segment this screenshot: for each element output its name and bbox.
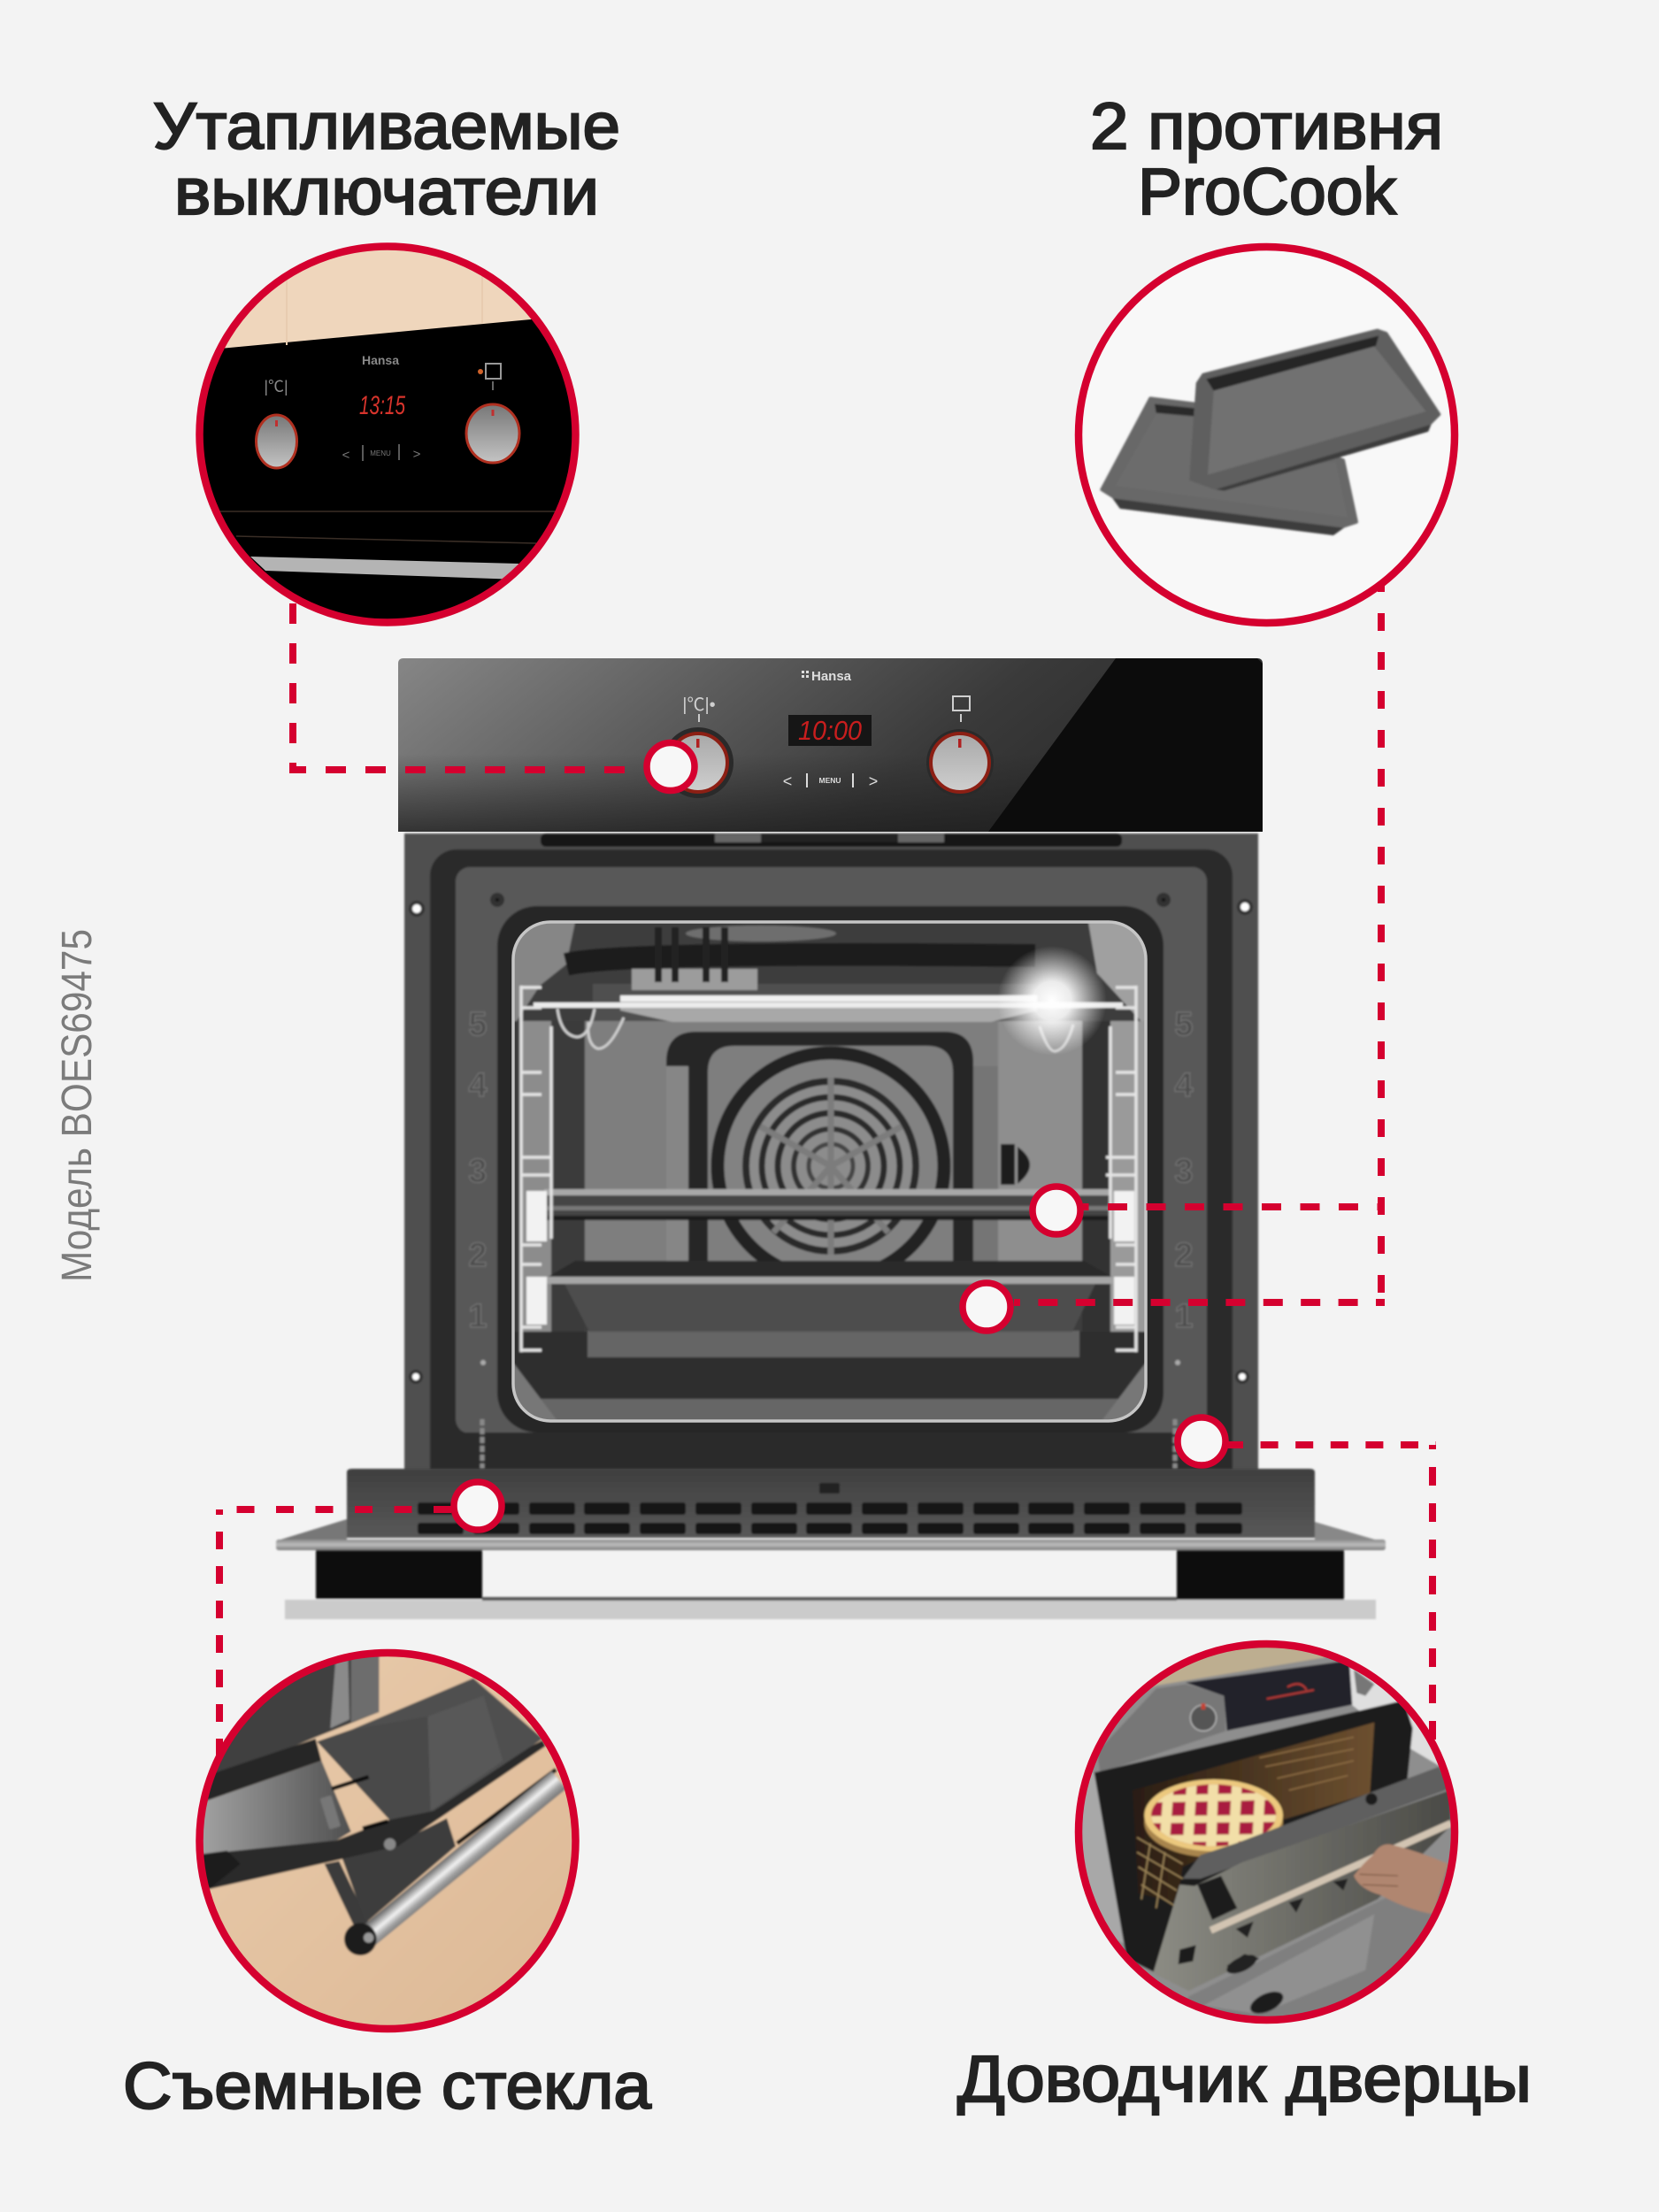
lower tray (547, 1261, 1113, 1278)
rack level numbers: 5 (1174, 1006, 1194, 1043)
oven (276, 658, 1386, 1619)
connector block and heating rods (632, 969, 757, 990)
touch menu: MENU (818, 776, 841, 785)
inset left knob: |℃| (264, 378, 288, 396)
touch menu (783, 772, 878, 790)
upper tray (547, 1194, 1108, 1217)
lower tray (1102, 398, 1356, 534)
glass edge (276, 1540, 1386, 1550)
door top (1183, 1767, 1449, 1878)
fan grille (742, 1078, 919, 1255)
touch menu: < (783, 772, 792, 790)
sensor (1001, 1144, 1030, 1185)
rack level numbers: 2 (468, 1237, 488, 1274)
inset touch menu: MENU (370, 449, 391, 457)
heading: door closer: Доводчик дверцы (957, 2042, 1532, 2116)
heading: two ProCook trays (1090, 89, 1443, 228)
vent slots (418, 1502, 1242, 1534)
rack level numbers: 4 (468, 1067, 488, 1104)
fan housing (666, 1032, 973, 1262)
marker dots (454, 743, 1225, 1530)
pie (1144, 1788, 1283, 1857)
heading: recessed switches: Утапливаемые (153, 89, 620, 163)
heading: recessed switches (153, 89, 620, 228)
circle: two baking trays (1079, 247, 1455, 623)
top rack (619, 1001, 1035, 1023)
model label: Модель BOES69475 (54, 929, 101, 1282)
callout connector lines (216, 574, 1436, 1761)
heading: removable glass: Съемные стекла (123, 2049, 652, 2123)
rail clips (526, 1191, 547, 1241)
inset touch menu: > (413, 447, 421, 462)
rack level numbers: 1 (468, 1298, 488, 1335)
rack level numbers: 5 (468, 1006, 488, 1043)
lower floor (585, 1262, 1082, 1288)
cabinet (1171, 1855, 1466, 2044)
oven door (276, 1469, 1386, 1619)
circle: door closer photo (1053, 1619, 1478, 2044)
rack level numbers: 4 (1174, 1067, 1194, 1104)
rack level numbers: 3 (468, 1153, 488, 1190)
heading: recessed switches: выключатели (174, 155, 599, 228)
door lower strip (285, 1600, 1376, 1619)
inset display: 13:15 (359, 391, 405, 420)
rails (521, 986, 1136, 1352)
circle: removable glass (177, 1628, 619, 2070)
back wall (584, 1019, 999, 1262)
left knob: |℃|• (682, 695, 716, 715)
heading: two ProCook trays: ProCook (1138, 155, 1397, 228)
rack level numbers: 3 (1174, 1153, 1194, 1190)
lamp glow (997, 946, 1107, 1056)
inset handle (250, 557, 518, 580)
upper tray (1191, 330, 1440, 489)
left knob (663, 695, 733, 798)
touch menu: > (869, 772, 878, 790)
rack level numbers: 2 (1174, 1237, 1194, 1274)
inset logo: Hansa (362, 353, 399, 367)
door feet (316, 1548, 482, 1599)
rack level numbers (468, 1006, 1194, 1335)
control panel (398, 658, 1263, 832)
inset right knob (466, 364, 519, 463)
heading: two ProCook trays: 2 противня (1090, 89, 1443, 163)
right knob (926, 696, 994, 796)
oven cavity (513, 922, 1146, 1421)
brand logo: Hansa (811, 669, 852, 684)
inset touch menu: < (342, 448, 350, 463)
circle: control panel close-up (195, 239, 584, 628)
hand (1354, 1844, 1448, 1914)
inset left knob (257, 378, 297, 468)
digital display: 10:00 (798, 715, 862, 746)
inset touch menu (342, 444, 421, 463)
oven body (404, 833, 1258, 1471)
rack level numbers: 1 (1174, 1298, 1194, 1335)
